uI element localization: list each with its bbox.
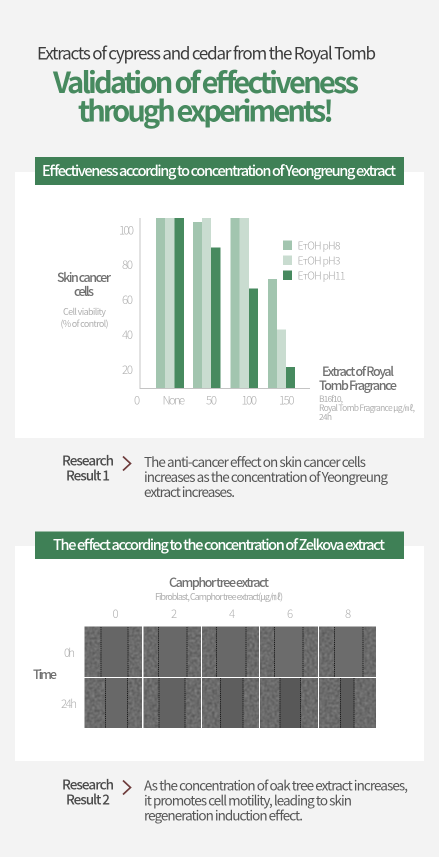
- research result 2: Result 2: [66, 788, 110, 808]
- concentration labels: [112, 606, 351, 622]
- y axis title: Cell viability: [63, 305, 106, 318]
- bars: 100: [230, 218, 258, 388]
- micrograph heading: Camphor tree extract: [169, 572, 269, 591]
- concentration labels: 8: [345, 606, 351, 622]
- x axis labels: 50: [206, 392, 217, 408]
- research result 2: it promotes cell motility, leading to skin: [144, 790, 352, 810]
- title: [52, 60, 359, 130]
- time labels: 24h: [61, 696, 77, 712]
- y axis labels: 20: [122, 362, 133, 378]
- y axis labels: 60: [122, 292, 133, 308]
- header bar: Zelkova: The effect according to the concentration of Zelkova extract: [53, 534, 385, 555]
- panel: concentration of Zelkova extract: [15, 532, 424, 761]
- research result 1: [62, 450, 388, 501]
- x axis title: B16f10,: [319, 393, 343, 405]
- row: 24h: [84, 678, 376, 728]
- research result 2: regeneration induction effect.: [144, 804, 303, 824]
- legend: EтOH pH3: [298, 254, 341, 268]
- icon: chevron: [123, 456, 130, 470]
- bar chart: cell viability: [119, 218, 346, 408]
- micrograph heading: [155, 572, 283, 603]
- concentration labels: 2: [171, 606, 177, 622]
- research result 1: The anti-cancer effect on skin cancer cells: [144, 451, 366, 471]
- micrograph heading: Fibroblast, Camphor tree extract(µg/㎖): [155, 590, 283, 603]
- x axis labels: [134, 392, 294, 408]
- x axis title: Tomb Fragrance: [319, 375, 397, 394]
- legend: EтOH pH8: [298, 238, 341, 254]
- concentration labels: 6: [287, 606, 293, 622]
- y axis title: cells: [74, 281, 94, 300]
- y axis labels: [119, 222, 134, 378]
- y axis labels: 80: [122, 257, 133, 273]
- research result 2: [62, 774, 408, 824]
- header bar: Yeongreung: Effectiveness according to concentration of Yeongreung extract: [42, 160, 396, 181]
- y axis title: [57, 267, 112, 330]
- y axis labels: 40: [122, 327, 133, 343]
- x axis labels: None: [162, 392, 185, 408]
- y axis title: Skin cancer: [57, 267, 112, 286]
- research result 2: As the concentration of oak tree extract increases,: [144, 774, 408, 794]
- row: 0h: [84, 626, 376, 677]
- x axis title: Royal Tomb Fragrance µg/㎖,: [319, 402, 415, 414]
- y axis title: (% of control): [60, 317, 108, 330]
- x axis labels: 0: [134, 392, 140, 408]
- concentration labels: 4: [229, 606, 235, 622]
- panel: concentration of Yeongreung extract: [15, 157, 424, 438]
- legend: [283, 238, 346, 284]
- research result 2: Research: [62, 774, 114, 794]
- research result 1: Result 1: [66, 464, 110, 484]
- icon: chevron: [123, 780, 130, 794]
- micrograph grid: [84, 626, 376, 728]
- title: through experiments!: [78, 88, 334, 130]
- x axis title: [319, 361, 415, 423]
- header bar: Zelkova: [35, 532, 404, 559]
- legend: EтOH pH11: [298, 268, 346, 284]
- time labels: [33, 645, 77, 712]
- x axis labels: 100: [242, 392, 257, 408]
- title: Validation of effectiveness: [52, 60, 359, 102]
- bars: 150: [268, 279, 295, 388]
- bars: None: [156, 218, 184, 388]
- research result 1: increases as the concentration of Yeongreung: [144, 466, 388, 486]
- x axis labels: 150: [279, 392, 294, 408]
- y axis labels: 100: [119, 222, 134, 238]
- bars: 50: [193, 218, 220, 388]
- x axis title: 24h: [319, 411, 332, 423]
- time labels: Time: [33, 664, 57, 683]
- research result 1: extract increases.: [144, 481, 235, 501]
- intro line: Extracts of cypress and cedar from the Royal Tomb: [37, 40, 376, 64]
- time labels: 0h: [64, 645, 75, 661]
- x axis title: Extract of Royal: [322, 361, 394, 380]
- research result 1: Research: [62, 450, 114, 470]
- concentration labels: 0: [112, 606, 119, 622]
